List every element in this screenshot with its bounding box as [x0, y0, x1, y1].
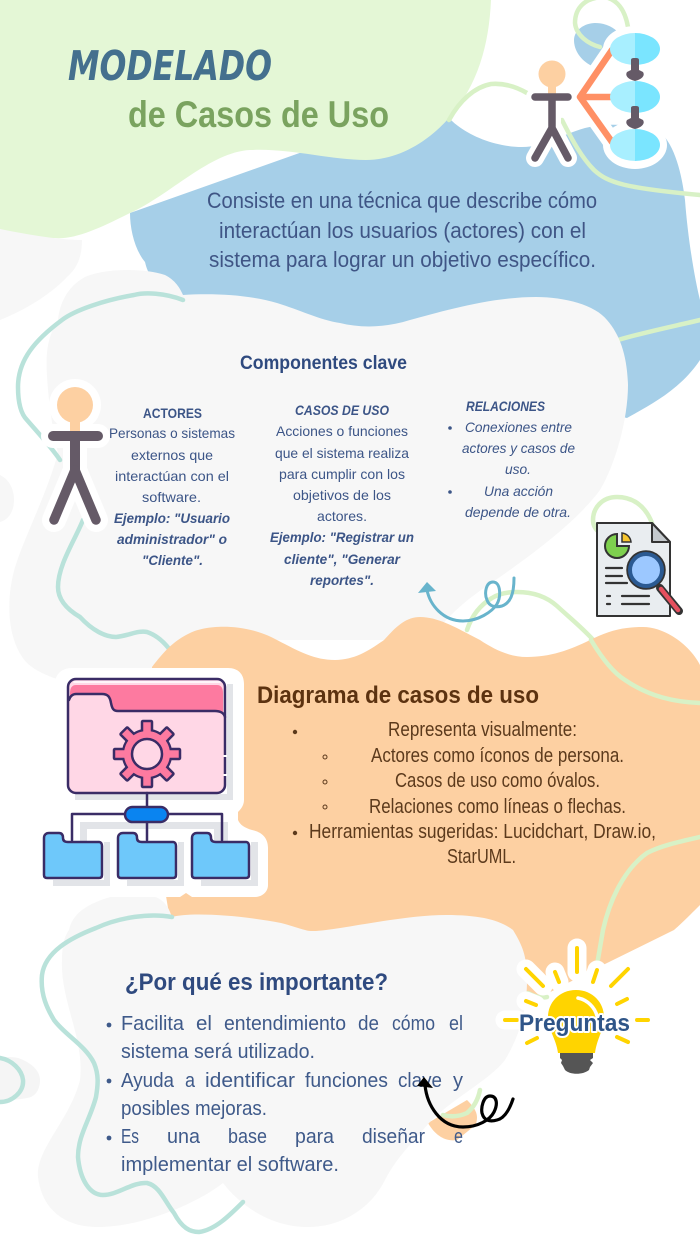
text: relaciones: Una acción	[484, 483, 553, 499]
icon: actor figure	[49, 379, 101, 520]
text: importance list: Ayuda	[121, 1070, 175, 1092]
decoration: green curves behind document	[467, 497, 652, 642]
text: importance list: e	[454, 1126, 463, 1148]
text: importance list: el	[449, 1013, 463, 1035]
text: importance list: implementar el software.	[121, 1154, 339, 1176]
text: importance list: Facilita	[121, 1013, 185, 1035]
text: importance list: sistema será utilizado.	[121, 1041, 315, 1063]
decoration: grey small left blob	[0, 1057, 40, 1100]
text: casos de uso: actores.	[317, 508, 367, 524]
text: casos de uso: para cumplir con los	[279, 466, 405, 482]
label: preguntas: Preguntas	[519, 1010, 630, 1037]
text: importance list: funciones	[305, 1070, 388, 1092]
title line: modelado: MODELADO	[68, 42, 272, 90]
text: importance list: y	[453, 1070, 463, 1092]
text: importance list: Es	[121, 1126, 139, 1148]
text: importance list: entendimiento	[224, 1013, 346, 1035]
panel: grey components blob	[9, 270, 628, 690]
text: casos de uso: que el sistema realiza	[275, 445, 409, 461]
arrow: black curl	[417, 1077, 513, 1127]
icon: actor and use cases	[535, 26, 667, 169]
decoration: small blue blob behind icon	[574, 23, 625, 66]
text: importance list: cómo	[392, 1013, 435, 1035]
text: relaciones: Conexiones entre	[465, 419, 572, 435]
text: importance list: a	[185, 1070, 196, 1092]
text: casos de uso: CASOS DE USO	[295, 402, 389, 418]
text: actores: Personas o sistemas	[109, 425, 235, 441]
text: actores: ACTORES	[143, 405, 202, 421]
decoration: green curves	[449, 0, 700, 340]
text: actores	[109, 405, 235, 568]
decoration: grey left sliver	[0, 475, 14, 522]
text: relaciones: RELACIONES	[466, 398, 546, 414]
decoration: small peach patch	[428, 1100, 477, 1140]
text: relaciones	[448, 398, 575, 520]
icon: light bulb with rays	[505, 948, 648, 1074]
text: casos de uso	[270, 402, 414, 588]
heading: diagrama de casos de uso: Diagrama de casos de uso	[257, 682, 539, 709]
text: importance list: posibles mejoras.	[121, 1098, 267, 1120]
text: actores: Ejemplo: "Usuario	[114, 510, 230, 526]
text: casos de uso: reportes".	[310, 572, 374, 588]
text: importance list: el	[196, 1013, 212, 1035]
icon: report with magnifier	[597, 523, 679, 616]
icon: gear	[114, 721, 180, 787]
text: importance list: base	[228, 1126, 267, 1148]
decoration: grey left blob	[0, 229, 82, 320]
decoration: lower teal curves	[0, 915, 243, 1232]
panel: peach diagram blob	[150, 617, 700, 1005]
decoration: teal curve	[18, 293, 183, 650]
shadow	[53, 684, 258, 886]
text: casos de uso: objetivos de los	[293, 487, 391, 503]
text: importance list	[107, 1013, 463, 1176]
text: actores: externos que	[131, 447, 213, 463]
icon: folder hierarchy sticker	[40, 668, 268, 897]
text: importance list: una	[167, 1126, 201, 1148]
arrow: blue curl	[418, 578, 514, 621]
intro text: interactúan los usuarios (actores) con el	[219, 218, 586, 243]
panel: green title blob	[0, 0, 491, 238]
intro text: sistema para lograr un objetivo específico.	[209, 247, 596, 272]
text: relaciones: depende de otra.	[465, 504, 571, 520]
text: relaciones: uso.	[505, 461, 531, 477]
text: diagram list: Actores como íconos de persona.	[371, 745, 624, 767]
intro text	[207, 188, 597, 272]
text: casos de uso: Acciones o funciones	[276, 423, 408, 439]
text: relaciones: actores y casos de	[462, 440, 575, 456]
heading: componentes clave: Componentes clave	[240, 353, 407, 374]
panel: blue intro blob	[130, 100, 700, 418]
title line: de casos de uso: de Casos de Uso	[128, 94, 389, 135]
text: diagram list: Casos de uso como óvalos.	[395, 770, 600, 792]
text: actores: "Cliente".	[142, 552, 203, 568]
text: diagram list: Representa visualmente:	[388, 719, 577, 741]
text: casos de uso: Ejemplo: "Registrar un	[270, 529, 414, 545]
text: importance list: identificar	[205, 1070, 295, 1092]
title	[68, 42, 389, 135]
text: diagram list: StarUML.	[447, 846, 516, 868]
text: importance list: para	[295, 1126, 335, 1148]
text: actores: administrador" o	[117, 531, 227, 547]
text: importance list: diseñar	[362, 1126, 425, 1148]
panel: grey importance blob	[38, 894, 527, 1227]
text: importance list: de	[358, 1013, 379, 1035]
text: actores: interactúan con el	[115, 468, 229, 484]
intro text: Consiste en una técnica que describe cómo	[207, 188, 597, 213]
text: importance list: clave	[398, 1070, 442, 1092]
text: actores: software.	[142, 489, 201, 505]
text: casos de uso: cliente", "Generar	[284, 551, 402, 567]
decoration: green curves over peach	[443, 640, 700, 1116]
text: diagram list	[293, 719, 656, 868]
icon outline	[535, 50, 612, 158]
text: diagram list: Herramientas sugeridas: Lucidchart, Draw.io,	[309, 821, 656, 843]
text: diagram list: Relaciones como líneas o flechas.	[369, 796, 626, 818]
heading: por qué es importante: ¿Por qué es importante?	[125, 969, 388, 996]
